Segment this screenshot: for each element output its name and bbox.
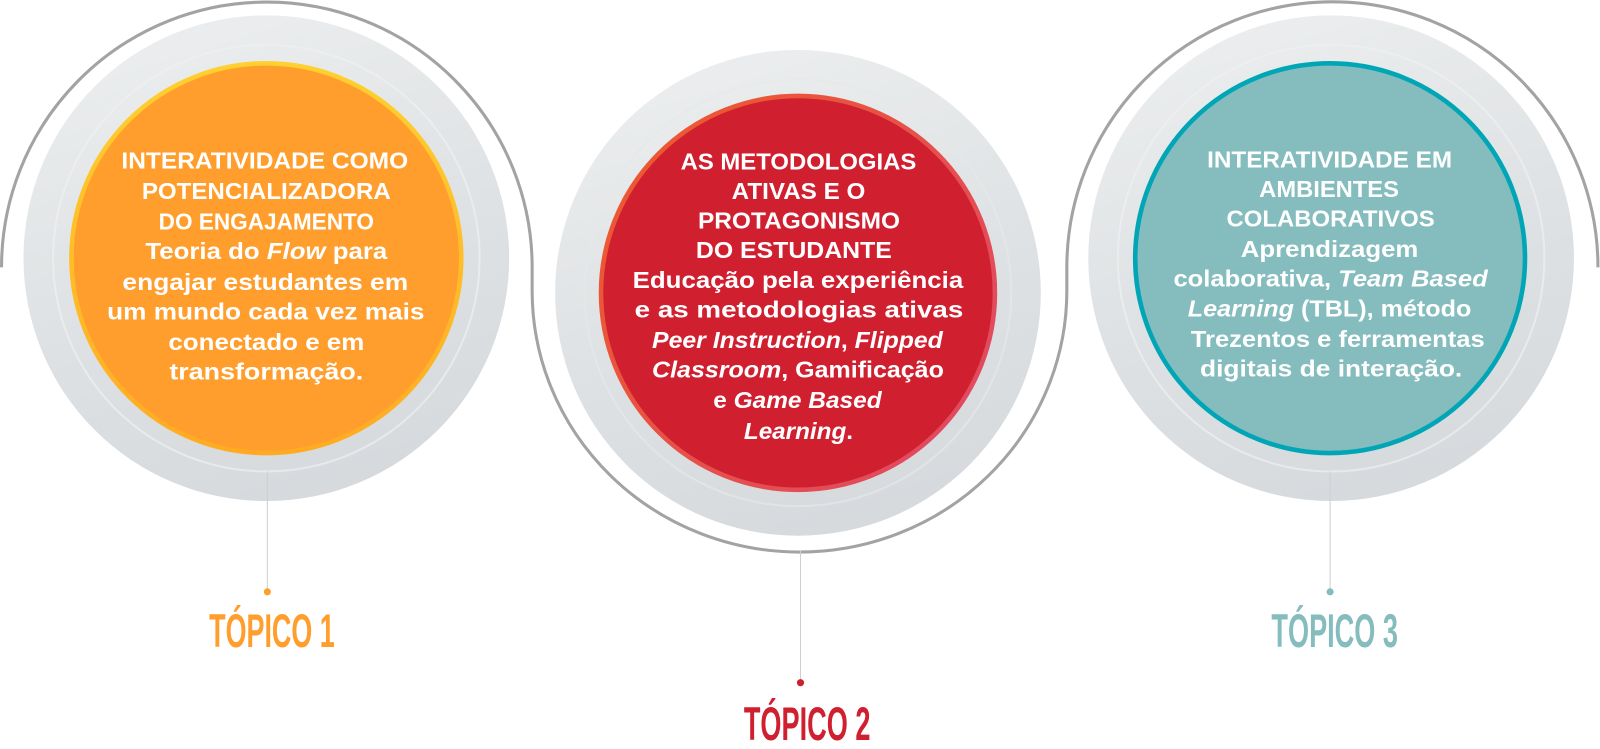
connector: topic 1 bbox=[264, 471, 271, 595]
panel: topic 2 circle bbox=[555, 50, 1041, 536]
text: topic 1 description: um mundo cada vez mais bbox=[107, 298, 424, 324]
text: topic 2 description: PROTAGONISMO bbox=[698, 208, 900, 234]
label: topic 3: TÓPICO 3 bbox=[1271, 605, 1398, 657]
panel: topic 3 circle bbox=[1088, 15, 1574, 501]
connecting wavy outline bbox=[2, 2, 1598, 552]
text: topic 3 description: colaborativa, Team Based bbox=[1173, 266, 1488, 292]
text: topic 3 description: Trezentos e ferramentas bbox=[1191, 326, 1485, 352]
text: topic 2 description: Peer Instruction , Flipped bbox=[652, 327, 944, 353]
text: topic 3 description: COLABORATIVOS bbox=[1227, 206, 1435, 232]
text: topic 2 description: Classroom , Gamificação bbox=[652, 357, 944, 383]
text: topic 2 description bbox=[633, 148, 964, 444]
text: topic 3 description: Learning (TBL), método bbox=[1188, 295, 1471, 321]
panel: topic 1 circle bbox=[23, 15, 509, 501]
text: topic 3 description: AMBIENTES bbox=[1259, 176, 1399, 202]
text: topic 1 description: DO ENGAJAMENTO bbox=[159, 209, 374, 235]
label: topic 1: TÓPICO 1 bbox=[209, 605, 335, 657]
text: topic 1 description: Teoria do Flow para bbox=[145, 238, 388, 264]
label: topic 2: TÓPICO 2 bbox=[744, 698, 870, 749]
text: topic 1 description bbox=[107, 147, 424, 385]
text: topic 2 description: e Game Based bbox=[713, 387, 882, 413]
text: topic 3 description: digitais de interação. bbox=[1200, 356, 1462, 382]
text: topic 1 description: engajar estudantes em bbox=[122, 269, 408, 295]
text: topic 3 description bbox=[1173, 146, 1488, 382]
text: topic 1 description: conectado e em bbox=[168, 329, 364, 355]
text: topic 1 description: INTERATIVIDADE COMO bbox=[121, 147, 408, 173]
text: topic 2 description: DO ESTUDANTE bbox=[696, 237, 892, 263]
text: topic 2 description: Learning. bbox=[744, 418, 853, 444]
text: topic 3 description: Aprendizagem bbox=[1241, 236, 1418, 262]
text: topic 2 description: e as metodologias ativas bbox=[635, 296, 963, 322]
text: topic 3 description: INTERATIVIDADE EM bbox=[1207, 146, 1452, 172]
connector: topic 2 bbox=[797, 550, 804, 686]
text: topic 1 description: transformação. bbox=[169, 359, 363, 385]
text: topic 2 description: ATIVAS E O bbox=[732, 178, 865, 204]
connector: topic 3 bbox=[1327, 471, 1334, 595]
text: topic 2 description: AS METODOLOGIAS bbox=[681, 148, 916, 174]
text: topic 2 description: Educação pela experiência bbox=[633, 267, 964, 293]
text: topic 1 description: POTENCIALIZADORA bbox=[142, 178, 391, 204]
